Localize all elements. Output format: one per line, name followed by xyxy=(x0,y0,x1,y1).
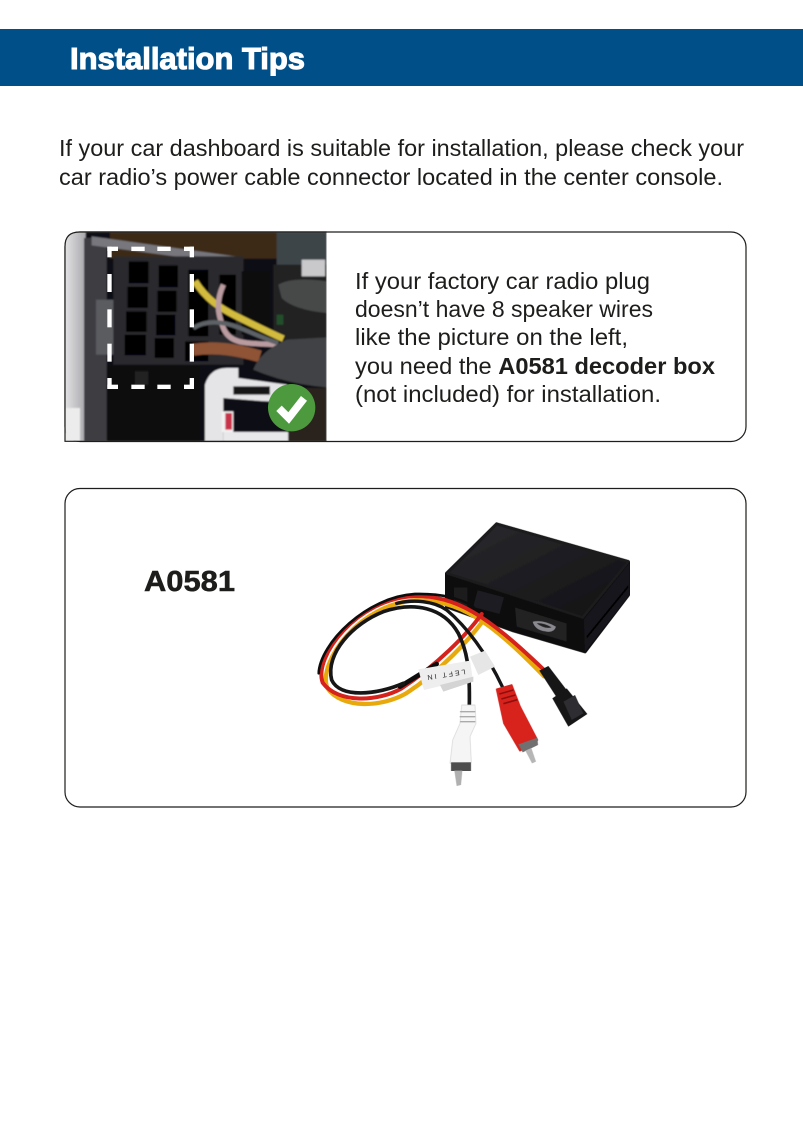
heading: Installation Tips: Installation Tips xyxy=(70,41,305,76)
power connector xyxy=(539,666,587,727)
product label: A0581 xyxy=(144,566,235,598)
wires xyxy=(195,281,283,339)
intro text block: If your car dashboard is suitable for installation, please check your xyxy=(59,135,744,161)
icon: green check mark xyxy=(268,384,315,431)
connector cells xyxy=(108,261,270,441)
panel: A0581 product xyxy=(65,488,746,807)
panel text: decoder box note: (not included) for installation. xyxy=(355,381,661,407)
panel text: decoder box note: you need the A0581 decoder box xyxy=(355,353,715,379)
photo: A0581 decoder box with cables xyxy=(319,524,629,786)
photo outline xyxy=(65,232,327,441)
intro text block xyxy=(59,135,744,190)
panel text: decoder box note: like the picture on the left, xyxy=(355,324,628,350)
decoder box xyxy=(447,524,629,652)
glove xyxy=(278,279,327,313)
dashed highlight box xyxy=(107,247,194,389)
panel text: decoder box note: If your factory car radio plug xyxy=(355,268,650,294)
intro text block: car radio’s power cable connector located in the center console. xyxy=(59,164,723,190)
panel: factory radio plug xyxy=(65,232,746,442)
white RCA plug xyxy=(450,705,476,786)
labels on wires: LEFT IN xyxy=(427,667,466,680)
photo: car radio plug with 8 speaker wires xyxy=(65,232,327,441)
wires xyxy=(319,594,544,705)
white clip xyxy=(205,368,287,441)
labels on wires xyxy=(418,651,495,692)
panel text: decoder box note: doesn’t have 8 speaker wires xyxy=(355,296,653,322)
red RCA plug xyxy=(497,685,538,763)
wire bundle xyxy=(326,600,544,704)
panel text: decoder box note xyxy=(355,268,715,407)
header banner xyxy=(0,29,803,86)
